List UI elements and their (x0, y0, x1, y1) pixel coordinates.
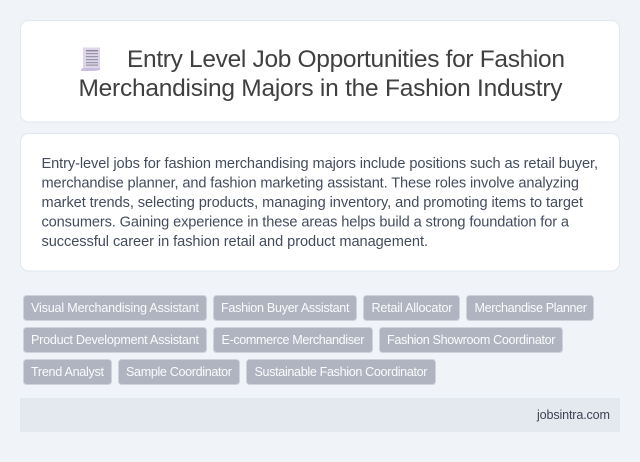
tag: Sample Coordinator (118, 360, 240, 384)
tag: Sustainable Fashion Coordinator (246, 360, 436, 384)
panel: title card (20, 20, 620, 122)
tag: Visual Merchandising Assistant (24, 296, 206, 320)
tag: Merchandise Planner: Merchandise Planner (474, 301, 587, 315)
description text: successful career in fashion retail and product management. (42, 234, 428, 250)
tag: Merchandise Planner (466, 296, 594, 320)
tag: Trend Analyst: Trend Analyst (31, 365, 104, 379)
title (78, 46, 565, 102)
tag: Sustainable Fashion Coordinator: Sustainable Fashion Coordinator (254, 365, 428, 379)
title: Merchandising Majors in the Fashion Industry (78, 75, 563, 102)
tag: Retail Allocator: Retail Allocator (372, 301, 452, 315)
tag: E-commerce Merchandiser (214, 328, 372, 352)
description text: merchandise planner, and fashion marketing assistant. These roles involve analyzing (42, 176, 579, 192)
icon: paper scroll (81, 48, 100, 71)
tag: Fashion Buyer Assistant (214, 296, 356, 320)
tag: Fashion Showroom Coordinator: Fashion Showroom Coordinator (387, 333, 556, 347)
tag: Fashion Buyer Assistant: Fashion Buyer Assistant (221, 301, 350, 315)
tag: E-commerce Merchandiser: E-commerce Merchandiser (222, 333, 364, 347)
tag list (24, 296, 594, 384)
tag: Product Development Assistant (24, 328, 206, 352)
tag: Sample Coordinator: Sample Coordinator (126, 365, 232, 379)
footer source: jobsintra.com (536, 408, 610, 422)
footer bar (20, 398, 620, 432)
panel: description card (20, 134, 620, 271)
tag: Fashion Showroom Coordinator (380, 328, 562, 352)
description text (42, 156, 598, 250)
tag: Retail Allocator (364, 296, 460, 320)
description text: consumers. Gaining experience in these areas helps build a strong foundation for a (42, 214, 570, 230)
description text: market trends, selecting products, managing inventory, and promoting items to target (42, 195, 583, 211)
tag: Trend Analyst (24, 360, 112, 384)
tag: Visual Merchandising Assistant: Visual Merchandising Assistant (31, 301, 200, 315)
description text: Entry-level jobs for fashion merchandising majors include positions such as retail buyer, (42, 156, 598, 172)
tag: Product Development Assistant: Product Development Assistant (31, 333, 200, 347)
title: Entry Level Job Opportunities for Fashion (127, 46, 565, 73)
